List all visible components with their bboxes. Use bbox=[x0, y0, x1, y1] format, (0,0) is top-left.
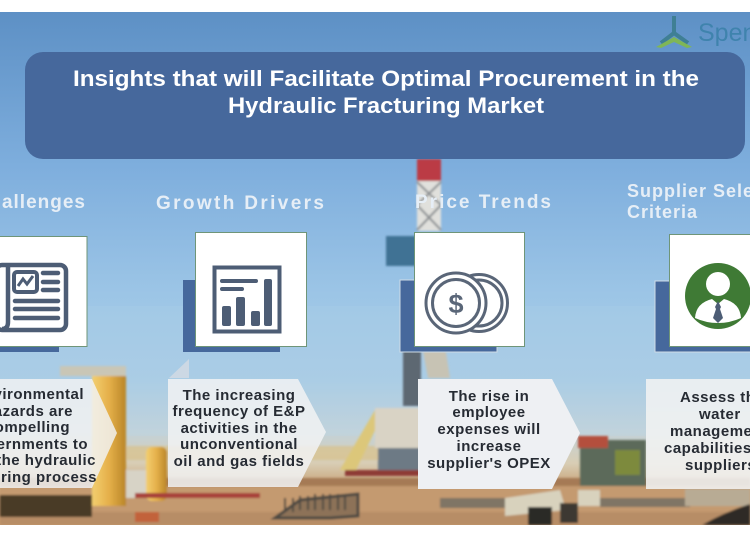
column: growth drivers bbox=[156, 193, 326, 487]
callout: price trends: increase bbox=[457, 438, 521, 455]
heading: price trends: Price Trends bbox=[415, 192, 551, 213]
title banner bbox=[25, 52, 745, 159]
card: coins icon: $ bbox=[448, 289, 464, 319]
callout: growth drivers: unconventional bbox=[180, 436, 298, 453]
ground bbox=[0, 485, 742, 514]
callout: supplier selection: water bbox=[698, 406, 741, 423]
pointer triangle bbox=[169, 359, 189, 378]
drilling rig mast bbox=[417, 159, 441, 231]
yellow tanks bbox=[92, 372, 126, 506]
card: bar chart icon bbox=[183, 232, 306, 352]
callout: growth drivers: activities in the bbox=[181, 420, 297, 437]
callout: supplier selection bbox=[646, 379, 750, 489]
card: supplier person icon bbox=[655, 234, 750, 352]
callout: price trends: expenses will bbox=[437, 421, 541, 438]
equipment at right bbox=[580, 440, 646, 486]
logo: Spend Edge mark and wordmark bbox=[656, 16, 750, 48]
callout: growth drivers: The increasing bbox=[183, 387, 295, 404]
callout: price trends: employee bbox=[452, 404, 526, 421]
pipework and stairs bbox=[0, 495, 92, 517]
column: price trends bbox=[400, 192, 580, 489]
callout: growth drivers bbox=[168, 379, 326, 487]
callout: challenges bbox=[0, 379, 117, 488]
card: coins icon bbox=[400, 232, 524, 352]
callout: price trends bbox=[418, 379, 580, 489]
callout: price trends: The rise in bbox=[449, 388, 529, 405]
heading: growth drivers: Growth Drivers bbox=[156, 193, 324, 214]
callout: growth drivers: frequency of E&P bbox=[172, 403, 306, 420]
callout: growth drivers: oil and gas fields bbox=[174, 453, 304, 470]
title banner: Insights that will Facilitate Optimal Procurement in the bbox=[73, 66, 699, 91]
column: supplier selection criteria bbox=[627, 181, 750, 489]
title banner: Hydraulic Fracturing Market bbox=[228, 93, 545, 118]
callout: price trends: supplier's OPEX bbox=[427, 455, 551, 472]
heading: supplier selection criteria: Criteria bbox=[627, 202, 698, 222]
column: challenges bbox=[0, 192, 117, 488]
card: newspaper icon bbox=[0, 236, 87, 352]
